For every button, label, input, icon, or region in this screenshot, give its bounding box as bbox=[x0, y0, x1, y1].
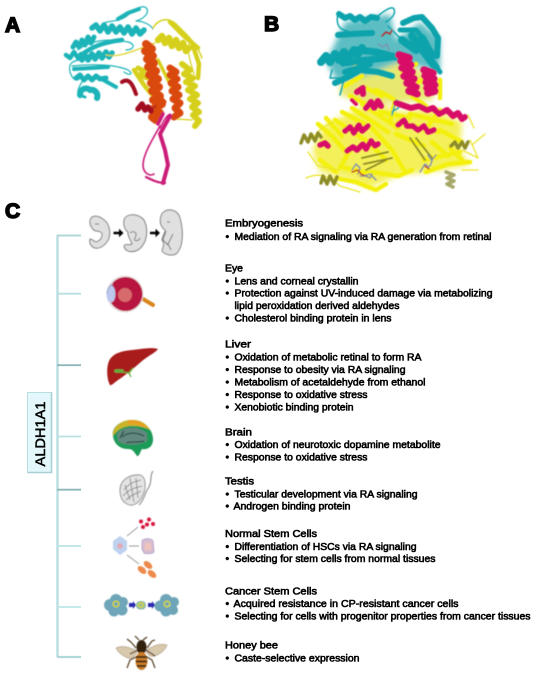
Liver text: • bbox=[226, 378, 230, 389]
Eye text: Cholesterol binding protein in lens bbox=[234, 314, 392, 325]
Liver text: • bbox=[226, 352, 230, 363]
icon: eye bbox=[106, 276, 153, 312]
Liver text: Oxidation of metabolic retinal to form RA bbox=[234, 352, 422, 363]
Brain text bbox=[225, 427, 441, 464]
panel label A: A bbox=[5, 14, 20, 37]
panel B: ALDH1A1 tetramer ribbon structure bbox=[301, 8, 485, 192]
Brain text: Oxidation of neurotoxic dopamine metabolite bbox=[234, 440, 441, 451]
text: function lists bbox=[225, 218, 530, 665]
Embryogenesis text bbox=[225, 218, 492, 243]
icon: testis bbox=[120, 471, 153, 505]
Testis text: Testicular development via RA signaling bbox=[234, 489, 418, 500]
Normal Stem Cells text: Differentiation of HSCs via RA signaling bbox=[234, 542, 417, 553]
Liver text: Response to obesity via RA signaling bbox=[234, 365, 406, 376]
Cancer Stem Cells text: Acquired resistance in CP-resistant cancer cells bbox=[234, 599, 458, 610]
Eye text: Eye bbox=[225, 264, 243, 275]
Liver text: • bbox=[226, 365, 230, 376]
Liver text: Xenobiotic binding protein bbox=[234, 402, 354, 413]
Brain text: • bbox=[226, 440, 230, 451]
Eye text bbox=[225, 264, 493, 325]
Normal Stem Cells text: Selecting for stem cells from normal tissues bbox=[234, 554, 436, 565]
Eye text: Protection against UV-induced damage via metabolizing bbox=[234, 289, 493, 300]
Normal Stem Cells text bbox=[225, 529, 436, 565]
Cancer Stem Cells text bbox=[225, 586, 530, 623]
Honey bee text: • bbox=[226, 654, 230, 665]
Liver text: • bbox=[226, 402, 230, 413]
Liver text: • bbox=[226, 390, 230, 401]
cyan upper subunits bbox=[321, 8, 440, 115]
icon: normal stem cell differentiation bbox=[113, 518, 158, 580]
Eye text: lipid peroxidation derived aldehydes bbox=[234, 301, 400, 312]
yellow-green domain ribbon bbox=[106, 20, 202, 126]
Brain text: Brain bbox=[225, 427, 252, 438]
magenta beta hairpin bbox=[143, 114, 170, 183]
icon: brain bbox=[113, 420, 153, 456]
Normal Stem Cells text: • bbox=[226, 542, 230, 553]
icon: cancer stem cells bbox=[104, 594, 179, 616]
Embryogenesis text: Embryogenesis bbox=[225, 218, 303, 230]
ALDH1A1 root box: ALDH1A1 bbox=[32, 401, 48, 466]
olive helices and sheets bbox=[301, 133, 468, 187]
panel label C: C bbox=[5, 200, 20, 223]
Testis text: • bbox=[226, 489, 230, 500]
Eye text: • bbox=[226, 289, 230, 300]
Cancer Stem Cells text: Cancer Stem Cells bbox=[225, 586, 317, 597]
Normal Stem Cells text: Normal Stem Cells bbox=[225, 529, 317, 540]
Liver text: Response to oxidative stress bbox=[234, 390, 368, 401]
icon: liver bbox=[107, 348, 158, 385]
Eye text: • bbox=[226, 314, 230, 325]
cyan catalytic domain ribbon bbox=[66, 7, 153, 98]
dark red turn bbox=[122, 80, 156, 111]
Liver text: Liver bbox=[225, 339, 252, 350]
Brain text: Response to oxidative stress bbox=[234, 453, 368, 464]
Eye text: Lens and corneal crystallin bbox=[234, 276, 358, 287]
Cancer Stem Cells text: Selecting for cells with progenitor properties from cancer tissues bbox=[234, 612, 530, 623]
yellow sheets, lower subunits bbox=[318, 64, 470, 190]
Testis text: Testis bbox=[225, 477, 254, 488]
Embryogenesis text: Mediation of RA signaling via RA generation from retinal bbox=[234, 232, 492, 243]
Honey bee text bbox=[225, 641, 360, 665]
magenta helices bbox=[320, 55, 465, 151]
Eye text: • bbox=[226, 276, 230, 287]
Testis text: Androgen binding protein bbox=[234, 502, 350, 513]
orange central helices bbox=[145, 44, 180, 120]
Testis text: • bbox=[226, 502, 230, 513]
Liver text bbox=[225, 339, 426, 413]
Cancer Stem Cells text: • bbox=[226, 599, 230, 610]
Embryogenesis text: • bbox=[226, 232, 230, 243]
Liver text: Metabolism of acetaldehyde from ethanol bbox=[234, 378, 426, 389]
Brain text: • bbox=[226, 453, 230, 464]
ALDH1A1 root box bbox=[28, 392, 52, 472]
ligand sticks bbox=[352, 30, 436, 180]
icon: embryo development stages bbox=[90, 210, 182, 255]
Honey bee text: Caste-selective expression bbox=[234, 654, 360, 665]
Normal Stem Cells text: • bbox=[226, 554, 230, 565]
tree connector: ALDH1A1 to contexts bbox=[57, 235, 81, 657]
icon: honey bee bbox=[116, 636, 167, 670]
panel A: ALDH1A1 monomer ribbon structure bbox=[66, 7, 202, 183]
Cancer Stem Cells text: • bbox=[226, 612, 230, 623]
soft background mass bbox=[312, 14, 470, 188]
Honey bee text: Honey bee bbox=[225, 641, 278, 652]
Testis text bbox=[225, 477, 418, 513]
panel label B: B bbox=[264, 13, 279, 36]
